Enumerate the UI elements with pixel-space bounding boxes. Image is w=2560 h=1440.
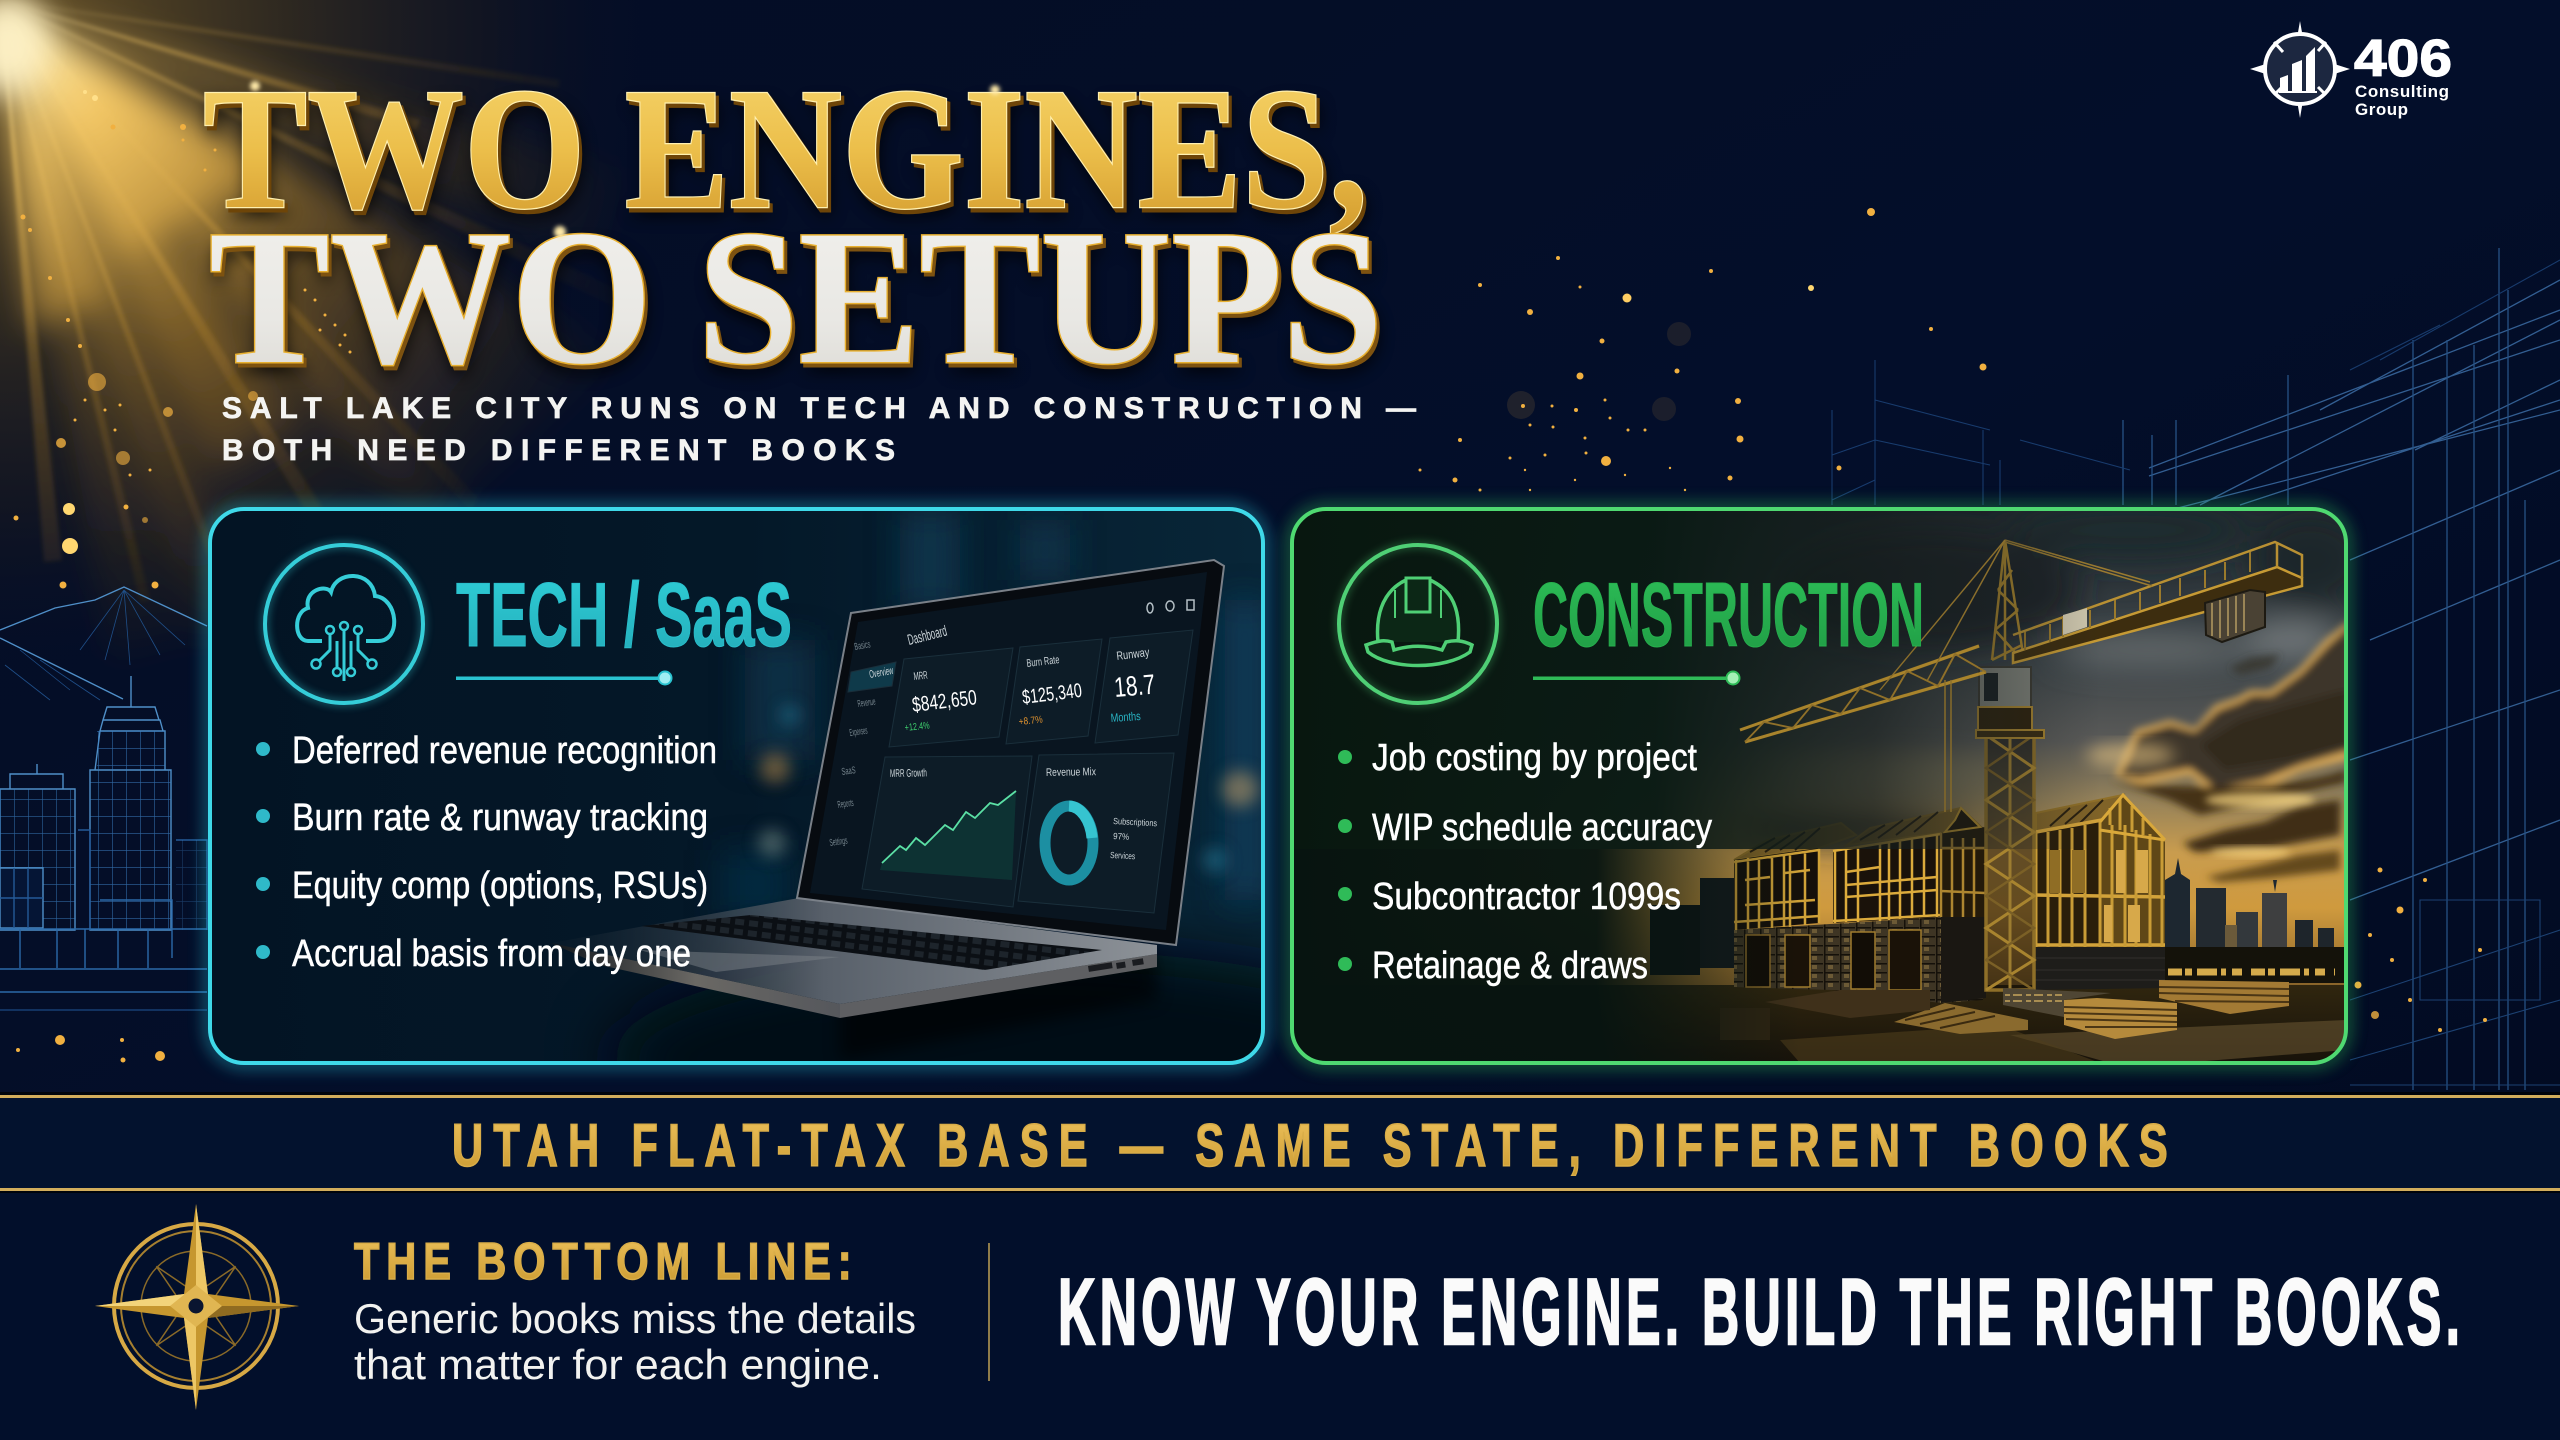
revenue mix donut [1045, 806, 1093, 880]
bottom section [0, 1193, 2560, 1440]
gold particles [14, 90, 2487, 1062]
table surface [596, 927, 1261, 1061]
dashboard text [829, 623, 1158, 861]
photo: tower crane [1740, 540, 2302, 990]
panel: construction [1292, 500, 2370, 1063]
crane cab [1976, 667, 2044, 738]
dashboard text: 97% [1113, 831, 1129, 842]
bottom line body: Generic books miss the details [354, 1295, 916, 1342]
dashboard text: Revenue [857, 697, 876, 710]
bottom line body [354, 1295, 916, 1388]
dashboard text: MRR Growth [890, 767, 927, 780]
MRR growth line chart [880, 791, 1016, 880]
title line 2: silver: TWO SETUPS [212, 200, 1386, 414]
photo: building frame [1734, 795, 2165, 1003]
title [203, 52, 1386, 414]
subtitle: BOTH NEED DIFFERENT BOOKS [222, 434, 895, 467]
construction bullet list: WIP schedule accuracy [1372, 807, 1712, 849]
dashboard text: +8.7% [1018, 715, 1043, 728]
dashboard text: $125,340 [1021, 680, 1083, 709]
logo text: Group [2355, 100, 2408, 119]
construction icon: hard hat [1339, 545, 1497, 703]
construction bullet list: Job costing by project [1372, 737, 1697, 779]
laptop [551, 560, 1224, 1060]
dashboard text: 18.7 [1113, 669, 1156, 703]
dashboard text: +12.4% [904, 720, 930, 734]
subtitle [222, 392, 1416, 467]
photo: ground [1610, 985, 2344, 1061]
window controls [1147, 600, 1194, 613]
logo text: 406 [2354, 30, 2452, 88]
construction bullet list: Subcontractor 1099s [1372, 876, 1681, 918]
construction heading: CONSTRUCTION [1533, 565, 1924, 666]
bottom line heading: THE BOTTOM LINE: [354, 1232, 852, 1290]
building section 3 [1941, 808, 1985, 917]
title sparkles [250, 81, 1000, 238]
blueprint: construction framing lines [1832, 248, 2560, 1090]
title line 1: gold: TWO ENGINES, [207, 61, 1372, 254]
title line 2: silver: TWO SETUPS [209, 190, 1383, 404]
dashboard text: Revenue Mix [1046, 766, 1096, 779]
tech underline [456, 672, 672, 684]
dashboard text: Overview [868, 665, 894, 681]
title line 2: silver: TWO SETUPS [212, 194, 1386, 408]
construction bullet list: Retainage & draws [1372, 945, 1648, 987]
tech bullet list [256, 730, 717, 975]
crane counterweight [2205, 590, 2265, 642]
photo: lumber stacks [1720, 980, 2289, 1040]
building roofs [1734, 795, 2123, 860]
divider [988, 1243, 990, 1381]
dashboard text: SaaS [841, 765, 856, 778]
crane top tower [1992, 540, 2024, 660]
tech bullet list: Burn rate & runway tracking [292, 797, 708, 839]
dashboard text: Subscriptions [1113, 816, 1158, 828]
icon: gold compass [95, 1204, 299, 1410]
title line 1: gold: TWO ENGINES, [206, 56, 1371, 249]
dashboard text: Services [1110, 850, 1136, 861]
photo: crane left boom over fade [1740, 540, 2005, 812]
panel: tech / SaaS [194, 494, 1278, 1078]
dashboard cards [848, 630, 1193, 913]
crane jib right [2013, 542, 2302, 663]
dashboard text: MRR [913, 670, 928, 683]
dashboard text: Basics [854, 639, 871, 653]
tech bullet list: Equity comp (options, RSUs) [292, 865, 708, 907]
building section 1 [1734, 848, 1819, 930]
logo text [2354, 30, 2452, 119]
dashboard text: Burn Rate [1026, 654, 1060, 670]
building masonry base [1734, 917, 2165, 1003]
tech bullet list: Accrual basis from day one [292, 933, 691, 975]
dashboard text: $842,650 [911, 686, 978, 717]
blueprint: mountains and Salt Lake City skyline [0, 587, 207, 1010]
construction underline [1533, 672, 1740, 684]
dashboard text: Months [1110, 709, 1141, 725]
dashboard text: Reports [837, 798, 854, 811]
building section 4 [2034, 795, 2165, 947]
dashboard text: Runway [1116, 645, 1150, 663]
tech icon: cloud network [265, 545, 423, 703]
dashboard text: Dashboard [906, 623, 949, 649]
tech bullet list: Deferred revenue recognition [292, 730, 717, 772]
crane cables [1880, 540, 2152, 812]
building section 2 [1833, 833, 1941, 923]
crane mast [1986, 735, 2034, 990]
tech heading: TECH / SaaS [456, 565, 792, 666]
laptop base [551, 943, 840, 1018]
logo: 406 Consulting Group [2250, 21, 2452, 119]
banner: Utah flat-tax base [0, 1092, 2560, 1193]
photo: dark left fade [1292, 509, 2100, 1063]
laptop lid [797, 560, 1224, 945]
photo: lights on horizon [2168, 968, 2335, 976]
light rays: top-left golden beam [0, 0, 760, 700]
construction bullet list [1338, 737, 1712, 987]
logo mark: compass with bars [2250, 21, 2350, 118]
logo text: Consulting [2355, 82, 2449, 101]
title line 1: gold: TWO ENGINES, [203, 52, 1368, 245]
call to action: KNOW YOUR ENGINE. BUILD THE RIGHT BOOKS. [1058, 1260, 2460, 1365]
subtitle: SALT LAKE CITY RUNS ON TECH AND CONSTRUCTION — [222, 392, 1416, 425]
dashboard text: Expenses [849, 726, 868, 739]
photo: sky and clouds [1598, 511, 2344, 985]
photo: city skyline [1650, 858, 2346, 983]
bottom line body: that matter for each engine. [354, 1341, 882, 1388]
banner: Utah flat-tax base: UTAH FLAT-TAX BASE — SAME STATE, DIFFERENT BOOKS [452, 1113, 2168, 1180]
dashboard text: Settings [829, 836, 848, 849]
crane jib left [1740, 646, 1986, 742]
